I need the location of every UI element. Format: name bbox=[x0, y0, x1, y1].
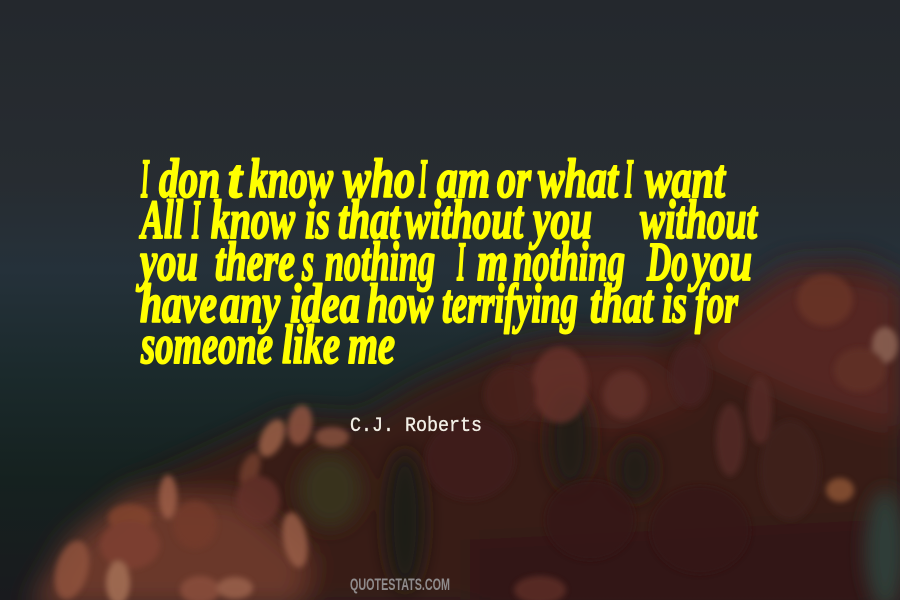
quote line 1: want bbox=[645, 148, 726, 209]
quote line 1: am bbox=[437, 148, 490, 209]
quote line 5: me bbox=[348, 314, 395, 375]
quote line 1 bbox=[141, 148, 726, 209]
quote line 3 bbox=[136, 231, 752, 292]
quote line 4: idea bbox=[290, 273, 360, 334]
quote line 2: know bbox=[211, 189, 295, 250]
watermark: QUOTESTATS.COM bbox=[350, 575, 450, 594]
quote line 4: how bbox=[367, 273, 433, 334]
quote line 4: is bbox=[662, 273, 687, 334]
author name: C.J. Roberts bbox=[350, 415, 482, 438]
icon: flowers bbox=[49, 274, 898, 600]
quote line 3: s bbox=[301, 231, 314, 292]
quote line 5: like bbox=[282, 314, 340, 375]
quote text bbox=[136, 148, 758, 375]
quote line 4: for bbox=[695, 273, 738, 334]
quote line 3: you bbox=[688, 231, 752, 292]
icon: dark foliage bbox=[298, 390, 900, 600]
quote line 1: I bbox=[625, 148, 634, 209]
quote line 2: without bbox=[405, 189, 524, 250]
quote line 1: what bbox=[538, 148, 619, 209]
quote line 4: that bbox=[590, 273, 654, 334]
quote line 3: Do bbox=[646, 231, 688, 292]
quote line 1: don bbox=[159, 148, 220, 209]
quote line 4: any bbox=[220, 273, 280, 334]
quote line 2: that bbox=[338, 189, 401, 250]
quote line 4 bbox=[140, 273, 738, 334]
quote line 2 bbox=[139, 189, 758, 250]
quote line 2: I bbox=[192, 189, 201, 250]
quote line 1: t bbox=[228, 148, 244, 209]
quote line 3: there bbox=[215, 231, 295, 292]
quote line 4: terrifying bbox=[442, 273, 578, 334]
background: flower mass bbox=[30, 260, 900, 600]
quote line 1: know bbox=[249, 148, 333, 209]
quote line 1: who bbox=[343, 148, 415, 209]
quote line 3: m bbox=[477, 231, 508, 292]
quote line 2: without bbox=[640, 189, 758, 250]
quote line 1: I bbox=[141, 148, 150, 209]
quote line 2: is bbox=[305, 189, 330, 250]
quote line 3: nothing bbox=[325, 231, 435, 292]
quote line 4: have bbox=[140, 273, 217, 334]
quote line 2: All bbox=[139, 189, 183, 250]
quote line 1: or bbox=[497, 148, 531, 209]
quote line 3: I bbox=[457, 231, 466, 292]
quote line 3: nothing bbox=[513, 231, 625, 292]
quote line 2: you bbox=[529, 189, 592, 250]
quote line 3: you bbox=[136, 231, 198, 292]
quote line 1: I bbox=[419, 148, 428, 209]
quote line 5: someone bbox=[140, 314, 273, 375]
